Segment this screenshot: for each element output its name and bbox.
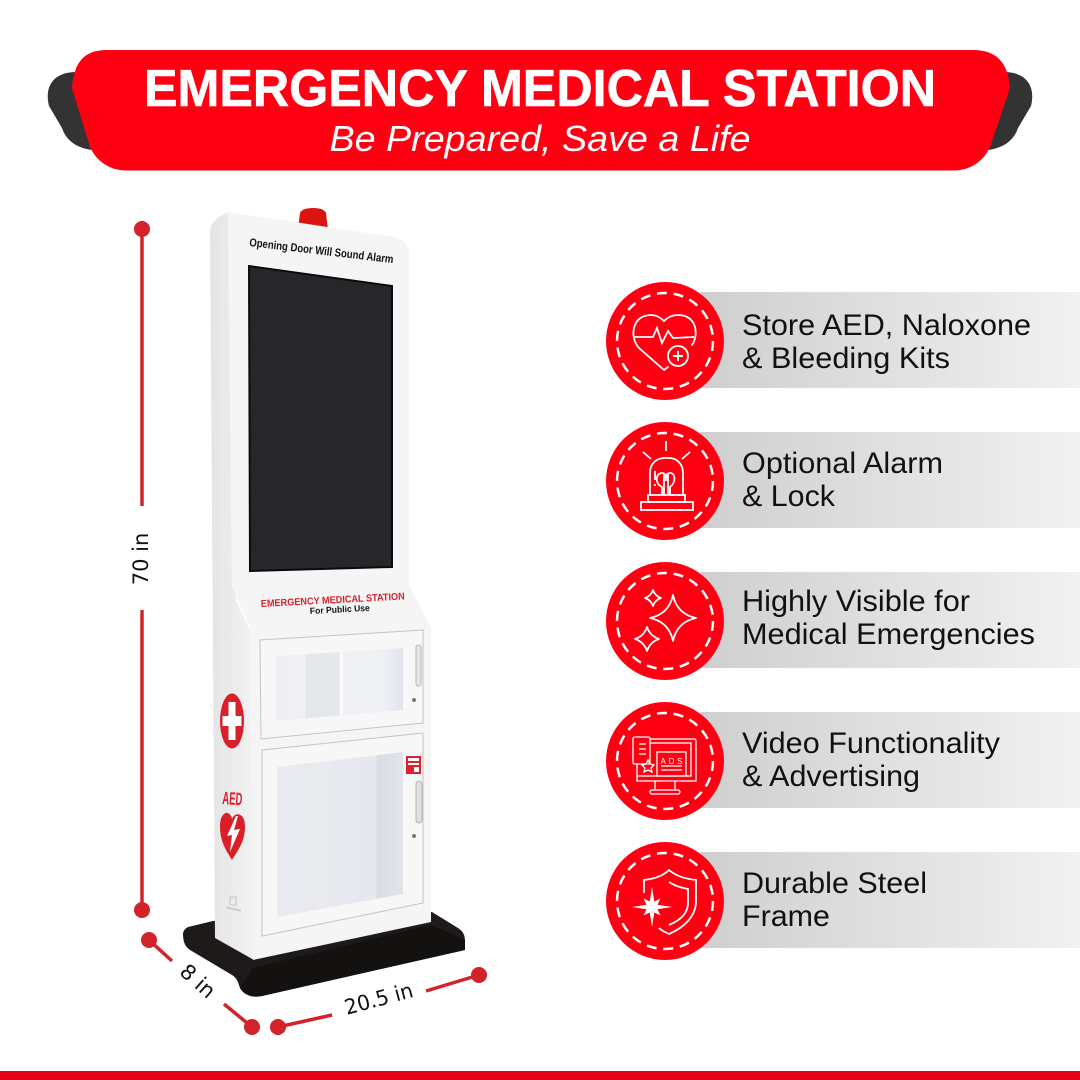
feature text: Frame — [742, 900, 830, 933]
feature text: & Lock — [742, 480, 835, 513]
small side logo — [226, 897, 241, 912]
lower lock — [412, 834, 416, 838]
alarm beacon — [298, 208, 328, 230]
feature 3: visibility — [606, 562, 1080, 680]
feature text: Store AED, Naloxone — [742, 309, 1031, 342]
icon: shield with burst — [606, 842, 724, 960]
kiosk side panel — [210, 212, 254, 960]
feature text: Optional Alarm — [742, 447, 943, 480]
feature 5: steel frame — [606, 842, 1080, 960]
icon: alarm beacon — [606, 422, 724, 540]
dimension: width 20.5 in: 20.5 in — [342, 978, 416, 1020]
feature bar — [700, 572, 1080, 668]
upper handle — [416, 645, 421, 686]
lower window — [277, 752, 403, 917]
subtitle: Be Prepared, Save a Life — [330, 118, 750, 159]
title: EMERGENCY MEDICAL STATION — [144, 60, 936, 118]
public use label: For Public Use — [310, 603, 370, 616]
dimension: width 20.5 in — [270, 967, 487, 1035]
first aid sticker — [220, 694, 244, 748]
feature text: Durable Steel — [742, 867, 927, 900]
station label: EMERGENCY MEDICAL STATION — [261, 591, 405, 610]
feature text: Highly Visible for — [742, 585, 970, 618]
screen — [249, 266, 392, 571]
red door sticker — [406, 756, 421, 774]
feature bar — [700, 712, 1080, 808]
bottom red stripe — [0, 1071, 1080, 1080]
feature text: & Advertising — [742, 760, 920, 793]
feature text: & Bleeding Kits — [742, 342, 950, 375]
icon: sparkles — [606, 562, 724, 680]
alarm notice: Opening Door Will Sound Alarm — [249, 237, 394, 266]
dimension: depth 8 in — [141, 932, 260, 1035]
upper lock — [412, 698, 416, 702]
upper cabinet door — [260, 630, 423, 739]
feature bar — [700, 292, 1080, 388]
feature 4: video and advertising — [606, 702, 1080, 820]
upper window — [276, 648, 403, 721]
lower handle — [416, 781, 422, 823]
base front shade — [240, 925, 465, 997]
banner red shape — [72, 50, 1010, 170]
feature bar — [700, 432, 1080, 528]
black base — [183, 912, 465, 997]
feature bar — [700, 852, 1080, 948]
AED text: AED — [222, 788, 243, 809]
header banner — [48, 50, 1032, 170]
feature text: Video Functionality — [742, 727, 1000, 760]
dimension: depth 8 in: 8 in — [175, 959, 220, 1003]
feature 2: alarm and lock — [606, 422, 1080, 540]
icon: monitor ads: ADS — [660, 757, 682, 766]
feature text: Medical Emergencies — [742, 618, 1035, 651]
lower cabinet door — [262, 733, 423, 936]
dimension: height 70 in: 70 in — [129, 533, 153, 585]
kiosk product — [183, 208, 465, 997]
dimension: height 70 in — [129, 221, 153, 918]
banner left tab — [48, 72, 110, 150]
icon: monitor ads — [606, 702, 724, 820]
kiosk front panel — [228, 212, 431, 960]
banner right tab — [970, 72, 1032, 150]
AED heart icon — [220, 813, 245, 860]
icon: heart with pulse — [606, 282, 724, 400]
feature 1: AED storage — [606, 282, 1080, 400]
